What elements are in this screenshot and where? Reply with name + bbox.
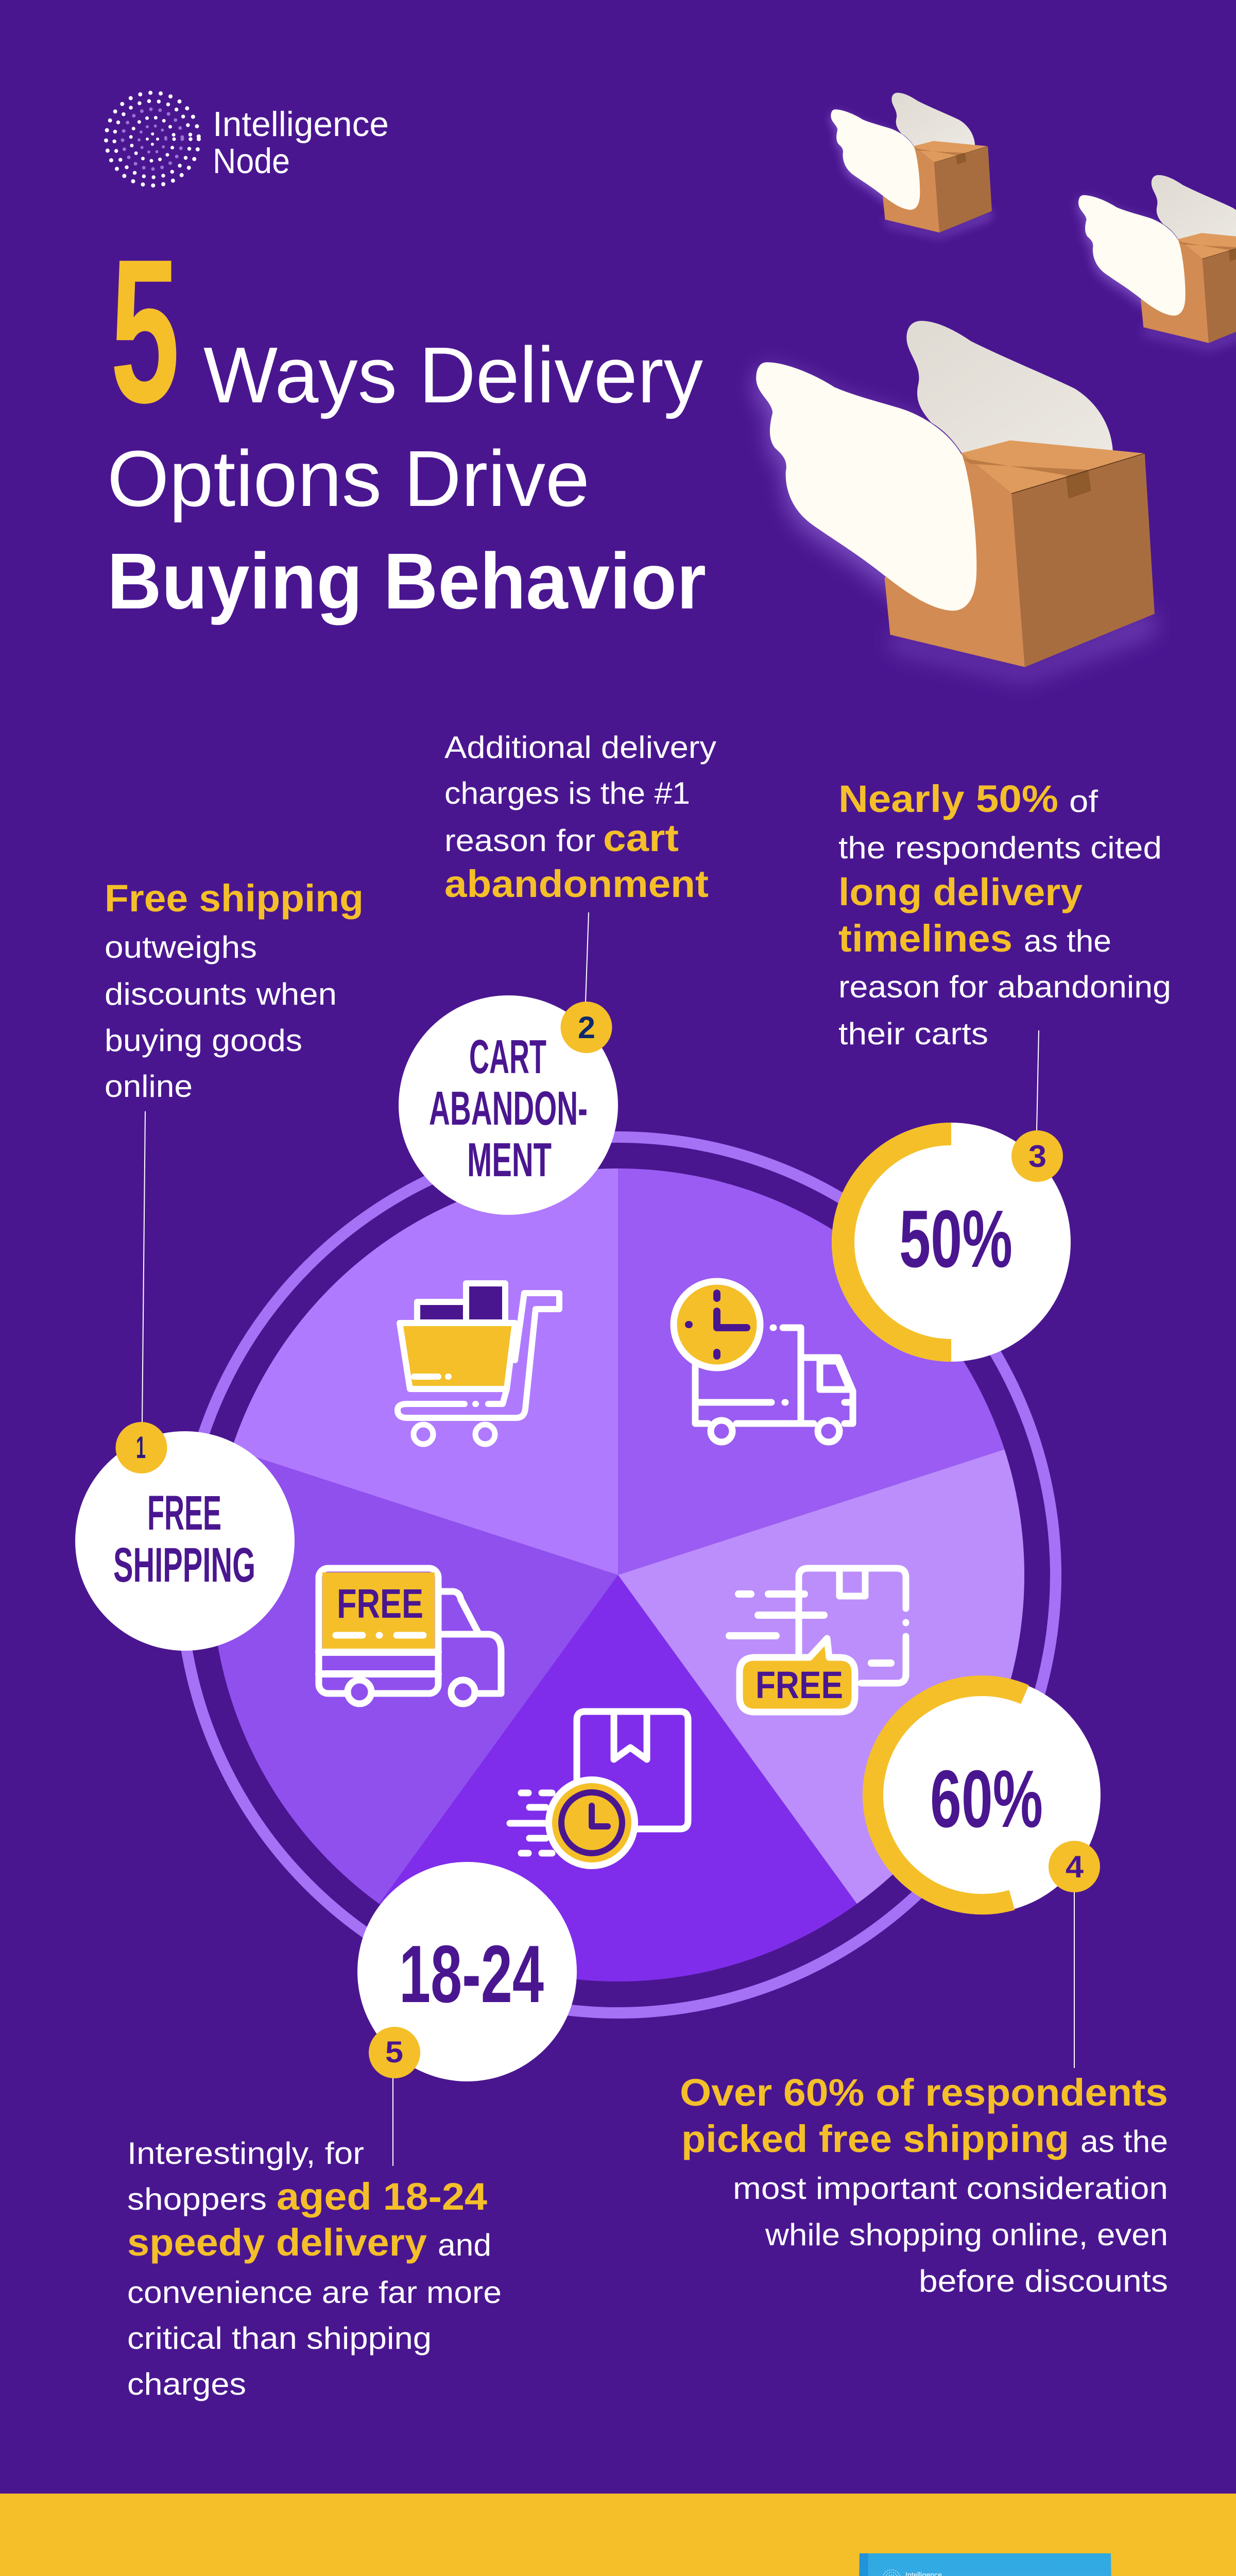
illustration: medium flying box <box>1077 175 1236 348</box>
callout 5: age 18-24 <box>127 1862 577 2401</box>
bubble <box>75 1431 295 1651</box>
bubble with half ring: 50% <box>899 1194 1012 1284</box>
bubble: FREE <box>147 1486 221 1540</box>
text block <box>105 877 364 1104</box>
text block: aged 18-24 <box>277 2175 487 2218</box>
text block: timelines <box>838 917 1012 960</box>
logo: Intelligence Node white <box>106 93 389 185</box>
bubble <box>399 995 618 1215</box>
text block: discounts when <box>105 977 337 1011</box>
bubble: SHIPPING <box>113 1538 255 1592</box>
text block: speedy delivery <box>127 2221 427 2264</box>
text block: picked free shipping <box>681 2117 1069 2160</box>
panel: ebook footer <box>0 2494 1236 2576</box>
title: Buying Behavior <box>107 537 706 625</box>
icon: delivery truck with clock <box>674 1281 853 1442</box>
leader line <box>1074 1892 1075 2068</box>
icon: FREE parcel with speech bubble <box>729 1568 906 1712</box>
text block: long delivery <box>838 871 1083 913</box>
leader line <box>1037 1030 1039 1131</box>
title: Ways Delivery <box>203 331 703 419</box>
text block: cart <box>603 817 679 859</box>
bubble <box>357 1862 577 2081</box>
badge 4: 4 <box>1066 1850 1084 1884</box>
text block: Interestingly, for <box>127 2136 364 2171</box>
bubble: CART <box>469 1030 546 1083</box>
text block: reason for abandoning <box>838 970 1171 1004</box>
text block: outweighs <box>105 930 257 964</box>
title: 5 <box>110 217 180 446</box>
icon: FREE truck: FREE <box>337 1581 423 1626</box>
icon: FREE parcel with speech bubble: FREE <box>756 1664 843 1706</box>
text block: Over 60% of respondents <box>680 2071 1168 2114</box>
leader line <box>142 1111 145 1422</box>
text block: most important consideration <box>733 2171 1168 2206</box>
badge 3 <box>1011 1130 1063 1182</box>
text block: the respondents cited <box>838 831 1162 865</box>
callout 2: cart abandonment <box>399 730 716 1215</box>
bubble with ring <box>864 1676 1101 1913</box>
title: Options Drive <box>107 434 590 523</box>
text block: Free shipping <box>105 877 364 920</box>
bubble: MENT <box>467 1133 552 1187</box>
text block: Nearly 50% <box>838 777 1058 820</box>
badge 5: 5 <box>385 2036 403 2069</box>
text block <box>680 2071 1168 2298</box>
badge 2 <box>560 1002 612 1053</box>
badge 4 <box>1049 1841 1100 1892</box>
icon: FREE truck <box>319 1568 501 1704</box>
leader line <box>392 2077 393 2166</box>
leader line <box>586 912 589 1002</box>
text block: Additional delivery <box>444 730 716 765</box>
bubble: ABANDON- <box>429 1081 588 1135</box>
text block: as the <box>1080 2124 1168 2159</box>
icon: shopping cart <box>398 1283 559 1444</box>
badge 1 <box>115 1422 167 1473</box>
text block: as the <box>1024 924 1111 958</box>
text block: buying goods <box>105 1023 302 1058</box>
text block: charges is the #1 <box>444 776 690 810</box>
text block <box>127 2136 502 2401</box>
text block: charges <box>127 2367 246 2401</box>
badge 1: 1 <box>136 1430 146 1465</box>
bubble with half ring <box>832 1123 1071 1362</box>
callout 4: 60 percent <box>680 1676 1168 2298</box>
title <box>107 217 706 625</box>
text block <box>838 777 1171 1051</box>
callout 1: free shipping <box>75 877 364 1651</box>
text block: critical than shipping <box>127 2321 432 2355</box>
bubble with ring: 60% <box>930 1754 1043 1844</box>
text block: and <box>438 2228 491 2262</box>
pie wheel <box>180 1137 1056 2013</box>
callout 3: 50 percent <box>832 777 1171 1362</box>
icon: parcel with timer <box>510 1711 688 1869</box>
badge 2: 2 <box>578 1010 595 1045</box>
text block: reason for <box>444 823 595 858</box>
text block: before discounts <box>919 2264 1168 2298</box>
text block: abandonment <box>444 862 709 905</box>
text block: convenience are far more <box>127 2275 502 2310</box>
logo: Intelligence Node white: Node <box>213 141 290 181</box>
text block: while shopping online, even <box>765 2217 1168 2252</box>
text block: shoppers <box>127 2182 267 2216</box>
badge 5 <box>369 2027 420 2078</box>
bubble: 18-24 <box>399 1929 544 2020</box>
ebook cover <box>854 2553 1117 2576</box>
logo: Intelligence Node white: Intelligence <box>213 105 389 144</box>
text block <box>444 730 716 905</box>
text block: of <box>1069 784 1098 819</box>
illustration: small flying box <box>830 93 992 236</box>
illustration: large flying box <box>754 321 1155 677</box>
badge 3: 3 <box>1028 1139 1046 1174</box>
text block: online <box>105 1069 193 1104</box>
text block: their carts <box>838 1016 988 1051</box>
